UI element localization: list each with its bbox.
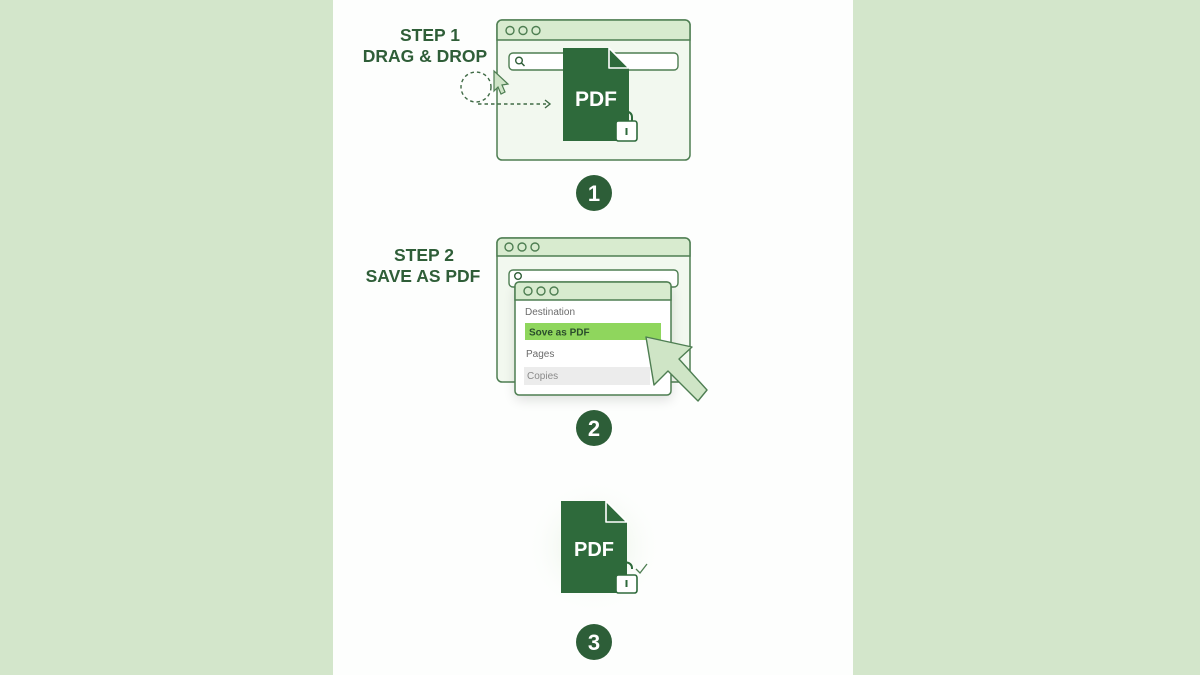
step 2 heading: SAVE AS PDF (366, 266, 481, 286)
search bar (509, 53, 678, 70)
step 1 heading: STEP 1 (400, 25, 460, 45)
icon: cursor (494, 71, 508, 94)
step number 3: 3 (588, 630, 600, 655)
arrow: dashed drag path (461, 72, 546, 104)
icon: big cursor (646, 337, 707, 401)
step number 2 (576, 410, 612, 446)
step number 1 (576, 175, 612, 211)
dialog window: Pages (526, 349, 554, 360)
panel: white card (333, 0, 853, 675)
step number 2: 2 (588, 416, 600, 441)
step 1 heading: DRAG & DROP (363, 46, 488, 66)
step 2 heading: STEP 2 (394, 245, 454, 265)
dialog window (515, 282, 672, 400)
step 3: unlocked pdf: PDF (574, 539, 614, 561)
icon: pdf document: PDF (575, 88, 617, 111)
step 2 illustration: print dialog (497, 238, 707, 401)
step number 3 (576, 624, 612, 660)
step 2 heading (366, 245, 481, 286)
dialog window: Destination (525, 307, 575, 318)
step 1 illustration: browser with pdf (461, 20, 690, 160)
icon: lock (616, 112, 637, 141)
icon: checkmark (636, 564, 647, 573)
step 3: unlocked pdf (524, 477, 664, 617)
step 1 heading (363, 25, 488, 66)
icon: open lock (616, 562, 637, 593)
icon: pdf document (563, 48, 629, 141)
dialog window: Copies (527, 371, 558, 382)
step number 1: 1 (588, 181, 600, 206)
dialog window: Sove as PDF (529, 328, 590, 338)
